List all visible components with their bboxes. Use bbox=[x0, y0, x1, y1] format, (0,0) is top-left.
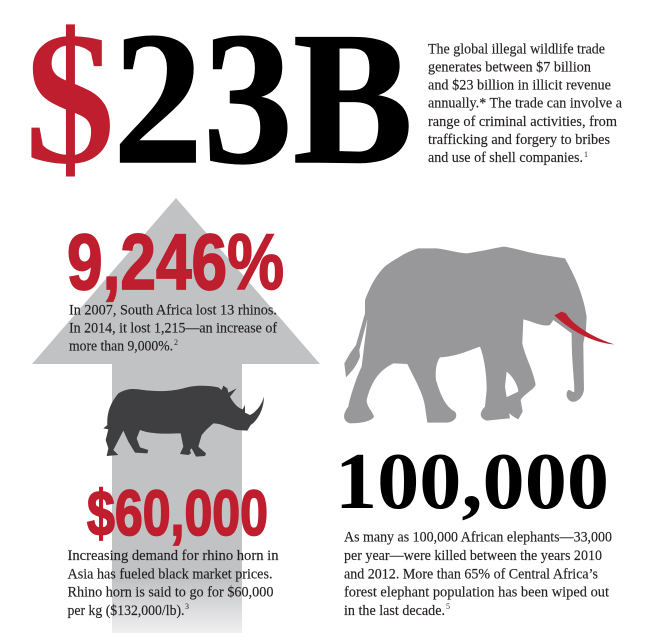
text block: global illegal wildlife trade: annually.* The trade can involve a bbox=[428, 96, 623, 112]
icon: elephant silhouette with red tusk bbox=[344, 247, 614, 423]
text block: global illegal wildlife trade: generates between $7 billion bbox=[428, 60, 592, 76]
text block: elephants killed: in the last decade. bbox=[344, 603, 445, 619]
text block: rhinos lost: 2 bbox=[174, 338, 178, 347]
text block: rhino horn prices: 3 bbox=[185, 602, 189, 611]
text block: elephants killed: 5 bbox=[446, 602, 450, 611]
text block: rhinos lost: more than 9,000%. bbox=[69, 338, 173, 354]
text block: elephants killed: and 2012. More than 65% of Central Africa’s bbox=[344, 566, 598, 582]
text block: global illegal wildlife trade: range of criminal activities, from bbox=[428, 114, 618, 130]
stat heading: $60,000: $60,000 bbox=[87, 477, 268, 549]
text block: global illegal wildlife trade: trafficking and forgery to bribes bbox=[428, 132, 610, 148]
icon: rhino silhouette bbox=[103, 386, 264, 457]
text block: global illegal wildlife trade: 1 bbox=[584, 150, 588, 159]
text block: rhino horn prices: Rhino horn is said to go for $60,000 bbox=[68, 584, 274, 600]
text block: rhinos lost bbox=[69, 302, 277, 354]
text block: rhino horn prices: Asia has fueled black market prices. bbox=[68, 566, 272, 582]
stat heading: 9,246%: 9,246% bbox=[67, 217, 284, 306]
text block: rhino horn prices: Increasing demand for rhino horn in bbox=[68, 548, 279, 564]
title: $23B: $ bbox=[25, 0, 115, 204]
stat heading: 100,000: 100,000 bbox=[335, 438, 609, 526]
text block: global illegal wildlife trade: and use of shell companies. bbox=[428, 150, 583, 166]
text block: rhinos lost: In 2007, South Africa lost 13 rhinos. bbox=[69, 302, 277, 318]
text block: global illegal wildlife trade: and $23 billion in illicit revenue bbox=[428, 78, 611, 94]
text block: rhinos lost: In 2014, it lost 1,215—an increase of bbox=[69, 320, 277, 336]
text block: rhino horn prices: per kg ($132,000/lb). bbox=[68, 603, 184, 619]
text block: rhino horn prices bbox=[68, 548, 279, 619]
text block: elephants killed: per year—were killed between the years 2010 bbox=[344, 548, 602, 564]
text block: elephants killed: As many as 100,000 African elephants—33,000 bbox=[344, 530, 612, 546]
text block: elephants killed bbox=[344, 530, 612, 619]
text block: global illegal wildlife trade bbox=[428, 42, 623, 166]
title: $23B: 23B bbox=[113, 0, 413, 204]
text block: elephants killed: forest elephant population has been wiped out bbox=[344, 584, 609, 600]
text block: global illegal wildlife trade: The global illegal wildlife trade bbox=[428, 42, 605, 58]
arrow: upward trend bbox=[32, 198, 320, 633]
